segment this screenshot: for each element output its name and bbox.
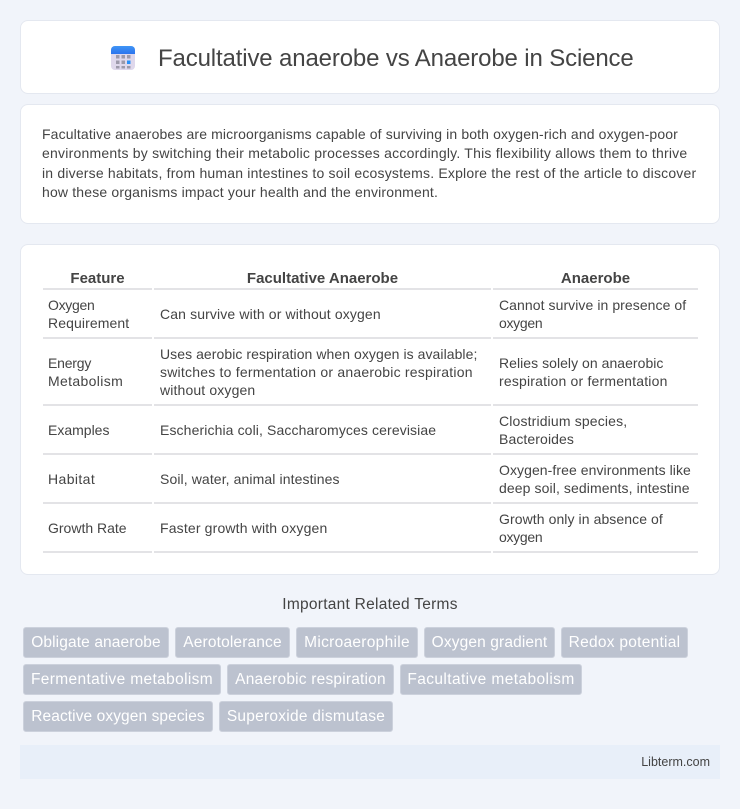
row: energy metabolism: respiration or fermentation	[499, 373, 668, 389]
tag: Microaerophile	[304, 634, 410, 651]
tag: Facultative metabolism	[407, 671, 575, 688]
row: oxygen requirement: Cannot survive in presence of	[499, 297, 686, 313]
row: examples	[48, 413, 627, 447]
tag	[424, 627, 555, 658]
tag: Redox potential	[569, 634, 680, 651]
tag	[23, 701, 213, 732]
tag: Aerotolerance	[183, 634, 282, 651]
intro text: Facultative anaerobes are microorganisms capable of surviving in both oxygen-rich and oxygen-poor	[42, 126, 678, 142]
row: energy metabolism: Metabolism	[48, 373, 123, 389]
tag	[175, 627, 290, 658]
footer text: Libterm.com	[641, 755, 710, 769]
row: oxygen requirement	[48, 297, 686, 331]
row: examples: Clostridium species,	[499, 413, 627, 429]
row: energy metabolism: Relies solely on anaerobic	[499, 355, 663, 371]
intro text: in diverse habitats, from human intestines to soil ecosystems. Explore the rest of the article to discover	[42, 165, 696, 181]
footer bar	[20, 745, 720, 779]
tag: Oxygen gradient	[432, 634, 547, 651]
tag: Anaerobic respiration	[235, 671, 386, 688]
intro text: environments by switching their metabolic processes accordingly. This flexibility allows them to thrive	[42, 145, 687, 161]
tag: Obligate anaerobe	[31, 634, 161, 651]
tag	[561, 627, 688, 658]
row: energy metabolism	[48, 346, 668, 398]
intro text	[42, 126, 696, 200]
row: growth rate: oxygen	[499, 529, 542, 545]
tag	[23, 627, 169, 658]
panel: introduction	[20, 104, 720, 224]
row: examples: Escherichia coli, Saccharomyces cerevisiae	[160, 422, 436, 438]
tag	[219, 701, 393, 732]
tag	[23, 664, 221, 695]
row: habitat: deep soil, sediments, intestine	[499, 480, 690, 496]
row: habitat: Soil, water, animal intestines	[160, 471, 340, 487]
row: habitat: Oxygen-free environments like	[499, 462, 691, 478]
row: oxygen requirement: oxygen	[499, 315, 542, 331]
tag	[227, 664, 394, 695]
title: Facultative anaerobe vs Anaerobe in Science	[158, 45, 634, 72]
table	[43, 270, 698, 553]
icon: calendar	[111, 46, 135, 70]
panel: comparison table	[20, 244, 720, 575]
intro text: how these organisms impact your health and the environment.	[42, 184, 438, 200]
row: growth rate: Faster growth with oxygen	[160, 520, 327, 536]
tag: Reactive oxygen species	[31, 708, 205, 725]
tag	[296, 627, 418, 658]
row: examples: Bacteroides	[499, 431, 574, 447]
tag: Fermentative metabolism	[31, 671, 213, 688]
row: growth rate	[48, 511, 663, 545]
row: habitat: Habitat	[48, 471, 95, 487]
row: oxygen requirement: Requirement	[48, 315, 129, 331]
row: habitat	[48, 462, 691, 496]
row: energy metabolism: without oxygen	[160, 382, 255, 398]
row: energy metabolism: switches to fermentation or anaerobic respiration	[160, 364, 473, 380]
row: energy metabolism: Energy	[48, 355, 91, 371]
row: growth rate: Growth Rate	[48, 520, 127, 536]
tag: Superoxide dismutase	[227, 708, 385, 725]
related terms heading: Important Related Terms	[282, 596, 458, 613]
column heading: feature: Feature	[70, 270, 125, 287]
row: oxygen requirement: Oxygen	[48, 297, 94, 313]
row: oxygen requirement: Can survive with or without oxygen	[160, 306, 381, 322]
column heading: facultative anaerobe: Facultative Anaerobe	[247, 270, 398, 287]
header panel	[20, 20, 720, 94]
row: examples: Examples	[48, 422, 109, 438]
row: growth rate: Growth only in absence of	[499, 511, 663, 527]
tags: related terms	[23, 627, 688, 732]
column heading: anaerobe: Anaerobe	[561, 270, 630, 287]
tag	[400, 664, 582, 695]
row: energy metabolism: Uses aerobic respiration when oxygen is available;	[160, 346, 477, 362]
